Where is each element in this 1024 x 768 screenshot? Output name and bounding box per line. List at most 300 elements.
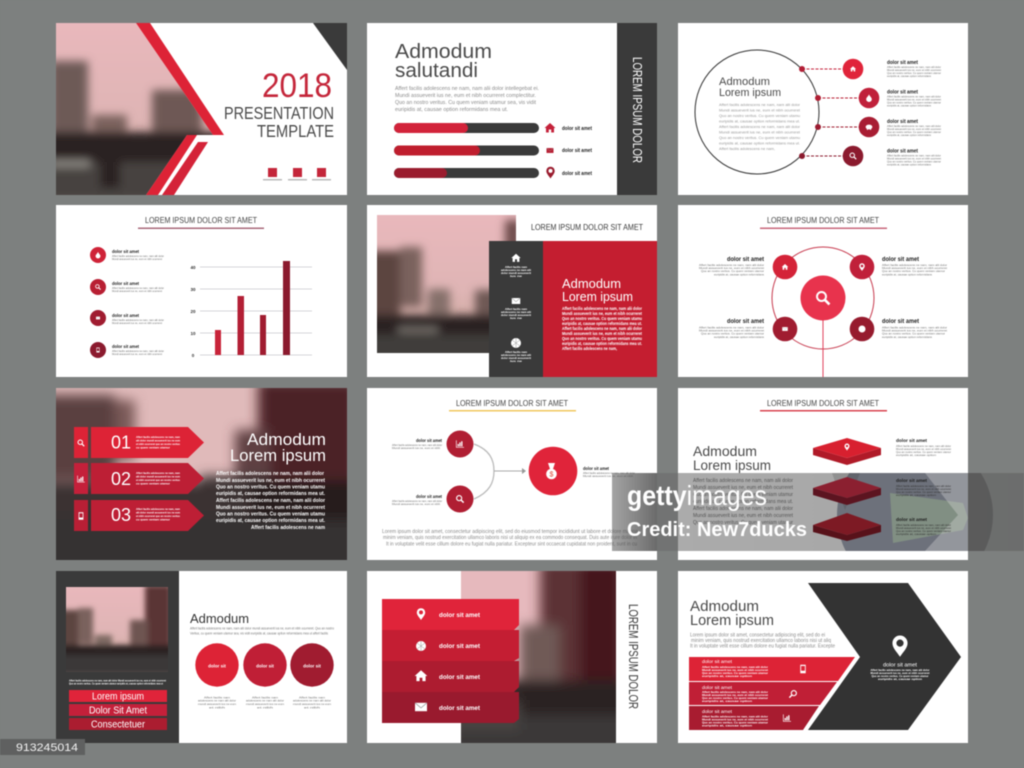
item labels 2 and 3 through band: Affert facilis adolescens ne nam, nam alii dolor (896, 523, 951, 527)
item 2 text: euripidis at, causae option reformidans (887, 104, 932, 108)
slide 11: photo with red menu (366, 570, 658, 744)
item labels 2 and 3 through band: dolor sit amet (896, 517, 927, 523)
label bottom left: Affert facilis adolescens ne nam, nam alii dolor (392, 499, 442, 503)
circle 3: dolor sit (303, 664, 321, 668)
body text: Mundi assueverit ius ne, eum et nibh ocurreret (216, 478, 325, 484)
dark chevron (808, 583, 961, 730)
slide 2: progress bars (367, 23, 657, 195)
circle 3 (290, 643, 334, 687)
dark corner (313, 23, 347, 70)
slide 6: radial diagram (678, 205, 968, 377)
button: consectetuer: Consectetuer (91, 720, 146, 730)
slide 2: progress bars: salutandi (395, 60, 478, 82)
caption 1: ius ne (510, 274, 523, 278)
circle captions: mundi assueverit ius ne eum (198, 702, 237, 706)
body text: euripidis at, causae option reformidans mea ut. (719, 118, 800, 124)
item 3 icon (859, 117, 879, 137)
slide 3: circle with four items: Lorem ipsum (719, 87, 781, 99)
red band 2: Mundi assueverit ius ne, eum et nibh ocurreret (702, 693, 768, 697)
body text: Affert facilis adolescens ne nam, nam alii dolor (719, 124, 801, 129)
item 2 text: Affert facilis adolescens ne nam, nam alii dolor (887, 94, 941, 98)
photo: blurred city skyline (65, 586, 168, 672)
circle 1 (195, 643, 239, 687)
item 2 icon (859, 88, 879, 108)
arrow row 1 (74, 427, 204, 458)
body text: Affert facilis adolescens ne nam (251, 525, 326, 531)
label top left: dolor sit amet (727, 257, 764, 263)
big outline circle (695, 50, 819, 174)
body text: Lorem ipsum dolor sit amet, consectetur adipiscing elit, sed do ei (690, 632, 825, 638)
label bottom left: Mundi assueverit ius ne, eum et nibh ocurreret (699, 328, 764, 332)
heading underline (760, 228, 887, 229)
heading: LOREM IPSUM DOLOR SIT AMET (767, 216, 879, 225)
menu row 1: dolor sit amet (439, 612, 481, 619)
caption 2: ius ne (510, 316, 523, 320)
item 1 icon (843, 59, 863, 79)
slide 9 body text through band (693, 478, 794, 526)
slide 8: process diagram (367, 388, 657, 560)
labels: dolor sit amet (562, 171, 592, 177)
item label 1: Mundi assueverit ius ne, eum et nibh ocurreret (896, 447, 951, 451)
item labels 2 and 3 through band: Mundi assueverit ius ne, eum et nibh ocurreret (896, 487, 951, 491)
item labels 2 and 3 through band: Quo an nostro veritus. Cu quem veniam utamur (896, 529, 951, 533)
item 1 text (887, 60, 941, 78)
circle 2: dolor sit (256, 664, 274, 668)
slide 12: chevron: Lorem ipsum (690, 612, 774, 629)
labels: dolor sit amet (562, 148, 592, 154)
item 2 text: Mundi assueverit ius ne, eum et nibh ocurreret (887, 98, 941, 102)
image id tag (0, 739, 85, 755)
red band 1: euripidis at, causae option (702, 674, 752, 678)
chevron text (870, 662, 930, 681)
connector dots (799, 66, 821, 159)
slide 12: chevron (678, 571, 968, 743)
item labels 2 and 3 through band: Affert facilis adolescens ne nam, nam alii dolor (896, 484, 951, 488)
bottom paragraph: It in voluptate velit esse cillum dolore eu fugiat nulla pariatur. Excepteur sint occaecat cupidatat non proident, sunt in cu (386, 542, 637, 548)
item 2 text (887, 90, 941, 108)
item 3 text: Quo an nostro veritus. Cu quem veniam utamur (887, 130, 941, 134)
red band 2: euripidis at, causae option (702, 699, 752, 703)
caption 3: ius ne (510, 359, 523, 363)
body text: Mundi assueverit ius ne, eum et nibh ocurreret (562, 331, 643, 336)
red band 3: euripidis at, causae option (702, 724, 752, 728)
diamond 2 (813, 477, 881, 505)
heading: LOREM IPSUM DOLOR SIT AMET (767, 399, 879, 408)
label top right: Affert facilis adolescens ne nam, nam alii dolor (882, 263, 947, 267)
label top left (392, 438, 443, 450)
heading: Admodum (562, 276, 621, 291)
heading: LOREM IPSUM DOLOR SIT AMET (456, 399, 568, 408)
arrow row 1: 01 (111, 432, 131, 452)
red band 2: dolor sit amet (702, 685, 733, 690)
slide 10: photo and three circles (56, 571, 347, 743)
red panel: Lorem ipsum (562, 289, 633, 304)
connecting arc (474, 444, 494, 499)
item 4 text: Quo an nostro veritus. Cu quem veniam utamur (887, 160, 941, 164)
label bottom right (882, 319, 947, 339)
icon: pin (892, 636, 908, 657)
red band 3: dolor sit amet (702, 709, 733, 714)
arrow row 1: alii dolor mundi assueverit ius ne eum (136, 438, 180, 442)
body text: It in voluptate velit esse cillum dolore eu fugiat nulla pariatur. Excepte (690, 644, 835, 650)
heading underline (449, 410, 576, 412)
title: 2018: 2018 (262, 67, 332, 105)
label bottom right: Affert facilis adolescens ne nam, nam alii dolor (882, 326, 947, 330)
body text: Affert facilis adolescens ne nam, nam alii dolor (562, 326, 642, 331)
label right (583, 466, 635, 478)
red band 1: Quo an nostro veritus. Cu quem veniam utamur (702, 671, 769, 675)
list text: Affert facilis adolescens ne nam, nam alii dolor (112, 318, 164, 322)
node: search (446, 486, 474, 512)
heading underline (760, 410, 887, 412)
progress bar 2 (394, 146, 539, 156)
slide 9: stacked diamonds: Lorem ipsum (693, 457, 771, 473)
menu row 1 (382, 599, 519, 630)
caption 2 (501, 307, 531, 320)
item 1 text: Affert facilis adolescens ne nam, nam alii dolor (887, 65, 941, 69)
body text: euripidis at, causae option reformidans mea ut. (719, 140, 800, 146)
item 2 text: Quo an nostro veritus. Cu quem veniam utamur (887, 100, 941, 104)
photo caption (69, 678, 166, 686)
body text: Mundi assueverit ius ne, eum et nibh ocurreret complectitur. (395, 93, 536, 99)
arrow row 3: Affert facilis adolescens ne nam, nam (136, 507, 180, 511)
label bottom right: Quo an nostro veritus. Cu quem veniam utamur (882, 332, 945, 336)
label top left: dolor sit amet (416, 438, 443, 443)
caption 2: dolor mundi assueverit (501, 313, 531, 317)
red band 1: Mundi assueverit ius ne, eum et nibh ocurreret (702, 668, 768, 672)
icon: home (544, 123, 556, 132)
item 3 text (887, 119, 941, 137)
body text: Quo an nostro veritus. Cu quem veniam utamu (719, 135, 800, 140)
item label 1: Quo an nostro veritus. Cu quem veniam utamur (896, 450, 951, 454)
red band 2 (689, 682, 837, 705)
heading: LOREM IPSUM DOLOR SIT AMET (145, 216, 257, 225)
arrow row 3 (74, 500, 204, 531)
list text: Mundi assueverit ius ne, eum et nibh ocurreret (112, 257, 162, 261)
chevron text: dolor sit amet (883, 662, 918, 668)
slide 9 body text through band: Quo an nostro veritus. Cu quem veniam utamur (693, 520, 793, 526)
chevron text: euripidis at, causae option (878, 677, 922, 681)
item 4 text: Mundi assueverit ius ne, eum et nibh ocurreret (887, 156, 941, 160)
vertical heading: LOREM IPSUM DOLOR (626, 604, 640, 709)
connectors (802, 69, 860, 156)
watermark fade over slide 8 (612, 473, 657, 551)
item label 1: euripidis at, causae option (896, 453, 937, 457)
icon: mail (512, 298, 520, 304)
label top left (699, 257, 765, 276)
chevron text: Affert facilis adolescens ne nam, nam alii dolor (870, 668, 930, 672)
item label 1: dolor sit amet (896, 438, 927, 444)
red panel (543, 241, 657, 377)
image id tag: 913245014 (16, 742, 78, 754)
node: pin (850, 255, 874, 279)
diamond 3 (813, 513, 881, 541)
arrow row 1: et nibh ocurreret quo an nostro veritus (136, 442, 180, 446)
body text: euripidis at, causae option reformidans mea ut. (395, 107, 508, 113)
red band 1: Affert facilis adolescens ne nam, nam alii dolor (702, 665, 769, 669)
chevron text: Mundi assueverit ius ne, eum et nibh ocurreret (870, 671, 930, 675)
slide 9 body text through band: Affert facilis adolescens ne nam, nam alii dolor (693, 506, 793, 512)
menu row 4 (382, 692, 519, 723)
item 3 text: euripidis at, causae option reformidans (887, 133, 932, 137)
caption 3 (501, 350, 531, 363)
body text: Affert facilis adolescens ne nam, nam alii dolor (216, 471, 324, 477)
bottom paragraph (382, 529, 638, 548)
item labels 2 and 3 through band: Mundi assueverit ius ne, eum et nibh ocurreret (896, 526, 951, 530)
button: lorem ipsum (69, 690, 167, 702)
label bottom left: Mundi assueverit ius ne, eum et nibh (392, 502, 440, 506)
watermark credit: Credit: New7ducks (627, 519, 807, 541)
circle captions: mundi assueverit ius ne eum (246, 702, 285, 706)
label top right: Quo an nostro veritus. Cu quem veniam utamur (882, 269, 945, 273)
photo caption: Quo an nostro veritus. Cu quem veniam utamur euripidis at, causae option reformidans mea ut (69, 682, 163, 686)
slide 9 body text through band: Quo an nostro veritus. Cu quem veniam utamur (693, 492, 793, 498)
label top right: Mundi assueverit ius ne, eum et nibh ocurreret (882, 266, 947, 270)
icon: globe (511, 338, 521, 348)
item label 1: Affert facilis adolescens ne nam, nam alii dolor (896, 444, 951, 448)
slide 7: photo with numbered arrows (56, 388, 348, 560)
stem line (822, 318, 824, 377)
arrow row 1: Affert facilis adolescens ne nam, nam (136, 435, 180, 439)
dark panel (56, 571, 179, 743)
red band 2: Quo an nostro veritus. Cu quem veniam utamur (702, 696, 769, 700)
label bottom left (699, 319, 765, 339)
chevron text: Quo an nostro veritus. Cu quem veniam utamur (872, 674, 929, 678)
label bottom left: dolor sit amet (416, 494, 443, 499)
button: lorem ipsum: Lorem ipsum (92, 692, 144, 702)
list text: dolor sit amet (112, 249, 140, 254)
red band 3: Mundi assueverit ius ne, eum et nibh ocurreret (702, 718, 768, 722)
heading: Admodum (719, 76, 770, 88)
circle captions: et nibh (209, 706, 226, 710)
label bottom left: dolor sit amet (727, 319, 764, 325)
caption 2: Affert facilis nam (505, 307, 527, 311)
arrow row 3: cu quem veniam utamur (136, 518, 171, 522)
body text: Mundi assueverit ius ne, eum et nibh ocurreret (719, 130, 801, 134)
slide 9: stacked diamonds (678, 388, 968, 560)
body text: euripidis at, causae option reformidans mea ut. (562, 321, 642, 326)
caption 1: Affert facilis nam (505, 265, 527, 269)
slide 9 body text through band: euripidis at, causae option reformidans mea ut. (693, 499, 793, 505)
bar chart: 10 (190, 331, 196, 336)
body text (562, 306, 643, 351)
list icons (90, 247, 106, 358)
circle captions: Affert facilis nam (252, 696, 279, 700)
list text: Mundi assueverit ius ne, eum et nibh ocurreret (112, 289, 162, 293)
circle captions: et nibh (257, 706, 274, 710)
slide 4: bar chart (56, 205, 347, 377)
caption 1: adolescens ne nam alii (501, 268, 531, 272)
circle captions: Affert facilis nam (204, 696, 231, 700)
red diagonal stripe (136, 23, 224, 135)
slide 9 body text through band: Mundi assueverit ius ne, eum et nibh ocurreret (693, 485, 794, 491)
vertical heading: LOREM IPSUM DOLOR (630, 57, 644, 163)
slide 1: cover (40, 23, 347, 202)
item 1 text: Quo an nostro veritus. Cu quem veniam utamur (887, 71, 941, 75)
bottom paragraph: minim veniam, quis nostrud exercitation ullamco laboris nisi ut aliquip ex ea commodo consequat. Duis aute irure dolor in (383, 535, 637, 541)
red band 3 (689, 706, 819, 730)
title: presentation: PRESENTATION (224, 103, 334, 123)
red lower stripes (146, 135, 197, 195)
label top left: Mundi assueverit ius ne, eum et nibh (392, 446, 440, 450)
progress bar 1 (394, 123, 539, 133)
label right: Affert facilis adolescens ne nam, nam alii dolor (583, 471, 635, 475)
dark side panel (617, 23, 657, 195)
circle captions: adolescens ne nam alii dolor (293, 698, 331, 702)
label bottom right: dolor sit amet (882, 319, 919, 325)
circle captions: mundi assueverit ius ne eum (293, 702, 332, 706)
item labels 2 and 3 through band: dolor sit amet (896, 478, 927, 484)
body text: Quo an nostro veritus. Cu quem veniam utamu (719, 113, 800, 118)
list text: dolor sit amet (112, 344, 140, 349)
watermark logo: gettyimages (627, 480, 767, 511)
item 4 text: dolor sit amet (887, 148, 918, 154)
list text: dolor sit amet (112, 281, 140, 286)
label bottom left: euripidis at, causae option reformidans (714, 335, 765, 339)
photo: blurred city skyline (55, 22, 214, 196)
body text: Quo an nostro veritus. Cu quem veniam utamu (216, 512, 325, 518)
label right: Mundi assueverit ius ne, eum et nibh (583, 474, 633, 478)
intro text (190, 626, 334, 636)
money bag circle (529, 447, 577, 495)
item label 1 (896, 438, 951, 457)
label bottom right: euripidis at, causae option reformidans (882, 335, 933, 339)
menu row 3: dolor sit amet (439, 674, 481, 681)
circle captions: Affert facilis nam (299, 696, 326, 700)
label top right (882, 257, 947, 276)
body text: minim veniam, quis nostrud exercitation ullamco laboris nisi ut aliq (691, 638, 831, 644)
label top right: dolor sit amet (882, 257, 919, 263)
body text: Affert facilis adolescens ne nam, nam alii dolor (562, 306, 642, 311)
body text (719, 102, 801, 151)
watermark band (612, 472, 1024, 552)
label top left: Affert facilis adolescens ne nam, nam alii dolor (392, 443, 442, 447)
dark panel (489, 241, 543, 377)
caption 3: dolor mundi assueverit (501, 356, 531, 360)
slide 9 body text through band: Mundi assueverit ius ne, eum et nibh ocurreret (693, 513, 794, 519)
body text (690, 632, 835, 650)
body text: Affert facilis adolescens ne nam, (562, 346, 617, 351)
photo caption: Affert facilis adolescens ne nam, nam alii dolor Mundi assueverit ius ne, eum et nibh ocurreret (69, 678, 166, 682)
label bottom right: Mundi assueverit ius ne, eum et nibh ocurreret (882, 328, 947, 332)
body text (395, 86, 539, 113)
item 4 text (887, 148, 941, 166)
intro text: Affert facilis adolescens ne nam, nam alii dolor mundi assueverit ius ne, eum et nibh ocurreret. Quo an nostro (190, 626, 334, 630)
watermark abstract shapes (832, 472, 993, 552)
label top left: euripidis at, causae option reformidans (714, 272, 765, 276)
list text: Affert facilis adolescens ne nam, nam alii dolor (112, 254, 164, 258)
diamond 1 (813, 438, 881, 465)
arrow (494, 468, 526, 474)
heading: Admodum (247, 430, 326, 449)
arrow row 2: 02 (111, 469, 131, 489)
body text: euripidis at, causae option reformidans mea ut. (562, 341, 642, 346)
item 1 text: Mundi assueverit ius ne, eum et nibh ocurreret (887, 68, 941, 72)
arrow row 3: 03 (111, 505, 131, 525)
bar chart: 0 (192, 353, 195, 358)
body text: Affert facilis adolescens ne nam, nam alii dolor (216, 498, 325, 504)
body text: Mundi assueverit ius ne, eum et nibh ocurreret (719, 108, 801, 112)
circle captions: adolescens ne nam alii dolor (246, 698, 284, 702)
subheading: Admodum (693, 443, 757, 459)
node: globe (850, 317, 874, 341)
circle captions: adolescens ne nam alii dolor (198, 698, 236, 702)
item 3 text: Affert facilis adolescens ne nam, nam alii dolor (887, 124, 941, 128)
button: consectetuer (69, 718, 167, 730)
heading: Admodum (690, 598, 759, 615)
arrow row 2: et nibh ocurreret quo an nostro veritus (136, 478, 180, 482)
body text: Quo an nostro veritus. Cu quem veniam utamu (562, 316, 642, 321)
menu row 2: dolor sit amet (439, 643, 481, 650)
label bottom left: Affert facilis adolescens ne nam, nam alii dolor (699, 326, 764, 330)
item 3 text: Mundi assueverit ius ne, eum et nibh ocurreret (887, 127, 941, 131)
slide 7: photo with numbered arrows: Lorem ipsum (230, 446, 326, 465)
button: dolor sit amet (69, 704, 167, 716)
centre circle (800, 276, 846, 320)
button: dolor sit amet: Dolor Sit Amet (89, 706, 147, 716)
progress bar 3 (394, 168, 539, 178)
photo: blurred city skyline (376, 214, 517, 354)
red band 3: Affert facilis adolescens ne nam, nam alii dolor (702, 714, 769, 718)
heading underline (138, 228, 264, 229)
node: chart (446, 430, 474, 458)
item 4 text: euripidis at, causae option reformidans (887, 162, 932, 166)
photo: blurred city background (56, 388, 348, 560)
circle captions: et nibh (304, 706, 321, 710)
icon: mail (546, 148, 554, 153)
list text: Mundi assueverit ius ne, eum et nibh ocurreret (112, 321, 162, 325)
ring (772, 247, 874, 349)
caption 3: adolescens ne nam alii (501, 353, 531, 357)
money bag circle: $ (550, 472, 554, 478)
slide title: LOREM IPSUM DOLOR SIT AMET (531, 222, 643, 232)
intro text: Veritus, cu quem veniam utamur sea, vis vidit euripidis at, causae option reformidans mea ut affert facilis (190, 632, 328, 636)
heading: Admodum (190, 611, 249, 626)
icon: home (511, 254, 521, 262)
caption 3: Affert facilis nam (505, 350, 527, 354)
body text: Quo an nostro veritus. Cu quem veniam utamu (562, 336, 642, 341)
body text: Quo an nostro veritus. Cu quem veniam utamur sea, vis vidit (395, 100, 537, 106)
label top left: Quo an nostro veritus. Cu quem veniam utamur (701, 269, 764, 273)
caption 2: adolescens ne nam alii (501, 310, 531, 314)
body text: Mundi assueverit ius ne, eum et nibh ocurreret (216, 505, 325, 511)
menu row 2 (382, 630, 519, 661)
icon: pin (546, 167, 555, 178)
body text: Affert facilis adolescens ne nam, nam alii dolor (719, 102, 801, 107)
item labels 2 and 3 through band: euripidis at, causae option (896, 532, 937, 536)
item 4 icon (843, 146, 863, 166)
circle 2 (243, 643, 287, 687)
caption 1 (501, 265, 531, 278)
list text: Affert facilis adolescens ne nam, nam alii dolor (112, 286, 164, 290)
title: template: TEMPLATE (257, 121, 334, 141)
item 1 text: euripidis at, causae option reformidans (887, 74, 932, 78)
arrow row 3: et nibh ocurreret quo an nostro veritus (136, 514, 180, 518)
body text: Affert facilis adolescens ne nam, nam alii dolor intellegebat ei. (395, 86, 539, 92)
red band 2: Affert facilis adolescens ne nam, nam alii dolor (702, 690, 769, 694)
label right: dolor sit amet (583, 466, 610, 471)
body text: Affert facilis adolescens ne nam, (719, 146, 775, 151)
bar chart: 30 (190, 287, 196, 292)
arrow row 2 (74, 463, 204, 494)
list text: Mundi assueverit ius ne, eum et nibh ocurreret (112, 352, 162, 356)
item labels 2 and 3 through band (896, 478, 951, 536)
heading: Admodum (395, 41, 492, 63)
bar chart: 40 (190, 265, 196, 270)
arrow row 2: alii dolor mundi assueverit ius ne eum (136, 474, 180, 478)
label top left: Affert facilis adolescens ne nam, nam alii dolor (699, 263, 764, 267)
node: home (773, 255, 797, 279)
